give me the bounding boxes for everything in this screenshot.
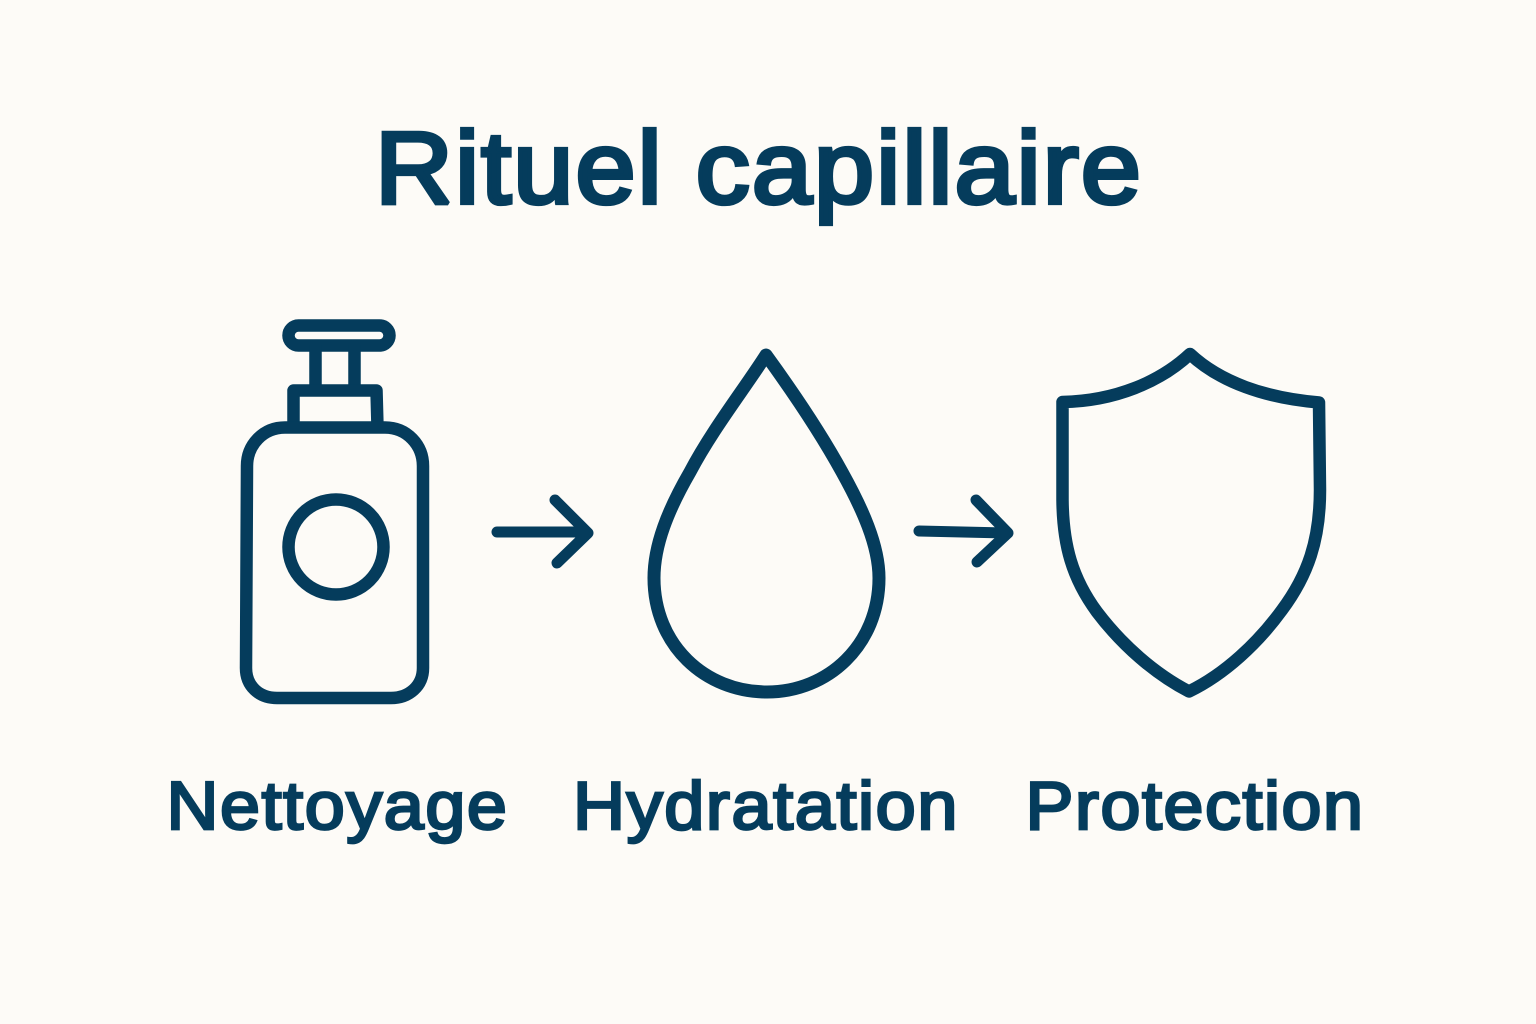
title: Rituel capillaire [375,111,1143,225]
label: Protection: Protection [1026,768,1364,844]
icon: shield [1062,354,1320,692]
label: Hydratation: Hydratation [573,768,959,844]
arrow: nettoyage to hydratation [497,500,588,563]
arrow: hydratation to protection [919,500,1008,562]
icon: water drop [654,355,879,692]
label: Nettoyage: Nettoyage [166,768,508,844]
icon: pump bottle [246,326,423,698]
